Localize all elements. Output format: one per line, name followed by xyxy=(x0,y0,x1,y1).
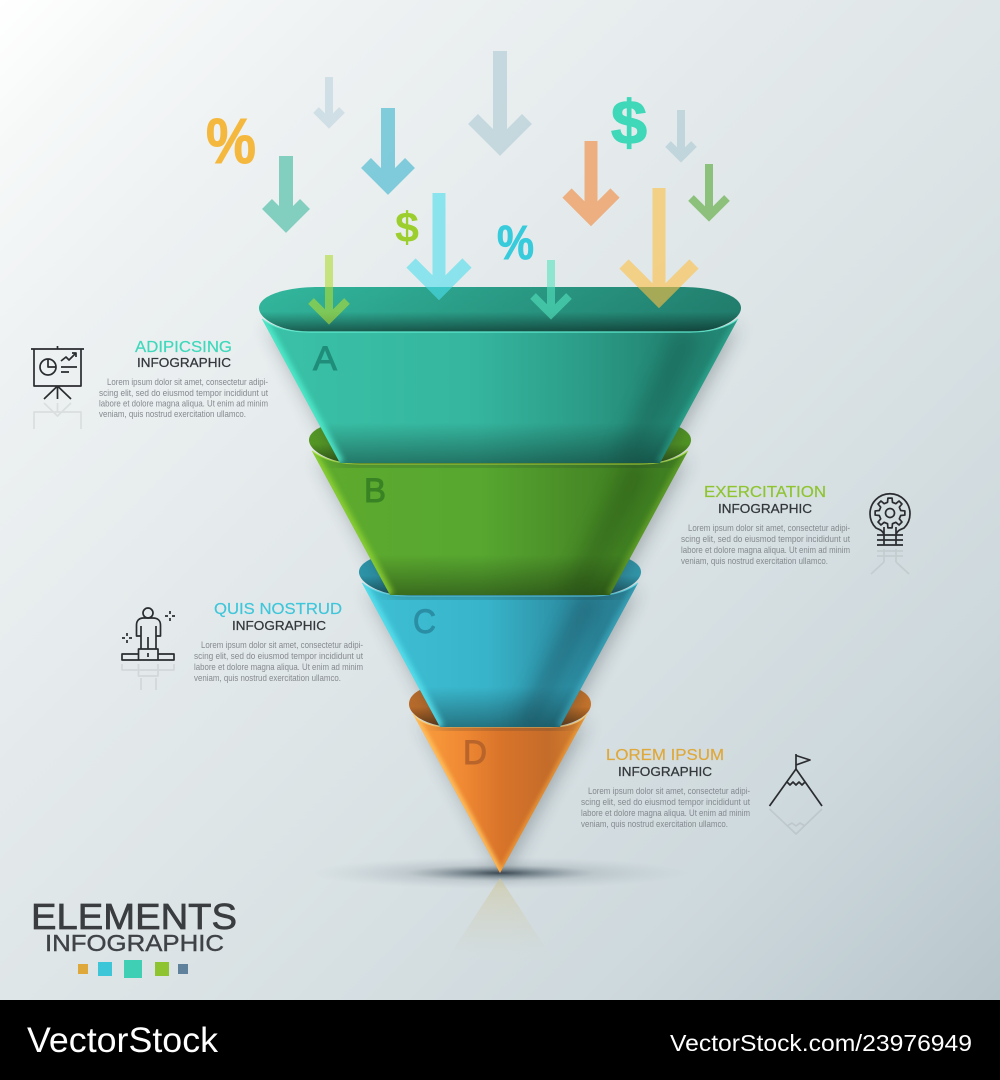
body text: scing elit, sed do eiusmod tempor incididunt ut xyxy=(194,651,363,661)
footer band xyxy=(0,1000,1000,1080)
footer url: VectorStock.com/23976949 xyxy=(670,1030,972,1056)
body text xyxy=(581,786,750,829)
heading: QUIS NOSTRUD xyxy=(214,601,342,618)
subheading: INFOGRAPHIC xyxy=(232,619,326,633)
footer logo: VectorStock xyxy=(27,1021,219,1060)
arrow: blue xyxy=(366,108,410,185)
body text: Lorem ipsum dolor sit amet, consectetur adipi- xyxy=(201,640,363,650)
body text: veniam, quis nostrud exercitation ullamco. xyxy=(194,673,341,683)
subheading: INFOGRAPHIC xyxy=(618,765,712,779)
floor shadow under funnel tip xyxy=(310,857,690,889)
body text: Lorem ipsum dolor sit amet, consectetur adipi- xyxy=(688,523,850,533)
icon: person on podium xyxy=(122,608,175,690)
arrow: cyan xyxy=(411,193,467,291)
icon: dollar teal: $ xyxy=(611,89,647,158)
funnel segment C xyxy=(359,551,641,731)
letter C: C xyxy=(413,603,436,641)
letter A: A xyxy=(313,340,337,378)
arrow: small grey right xyxy=(668,110,694,157)
body text xyxy=(194,640,363,683)
panel: adipicsing xyxy=(99,339,268,419)
icon: percent orange: % xyxy=(206,105,256,177)
body text xyxy=(99,377,268,419)
heading: LOREM IPSUM xyxy=(606,747,724,764)
panel: exercitation xyxy=(681,484,850,566)
body text: labore et dolore magna aliqua. Ut enim ad minim xyxy=(681,545,850,555)
icon: presentation board xyxy=(31,346,84,429)
arrow: green xyxy=(691,164,727,216)
subheading: INFOGRAPHIC xyxy=(718,502,812,516)
title line 1: ELEMENTS xyxy=(31,896,237,937)
arrow: mint xyxy=(533,260,569,314)
icon: percent cyan: % xyxy=(497,217,534,270)
body text: labore et dolore magna aliqua. Ut enim ad minim xyxy=(194,662,363,672)
body text: scing elit, sed do eiusmod tempor incididunt ut xyxy=(681,534,850,544)
funnel segment A xyxy=(259,287,741,467)
icon: light bulb with gear xyxy=(870,494,910,574)
body text xyxy=(681,523,850,566)
funnel segment D xyxy=(409,682,591,876)
arrow: small grey xyxy=(316,77,342,123)
body text: scing elit, sed do eiusmod tempor incididunt ut xyxy=(99,388,268,398)
body text: Lorem ipsum dolor sit amet, consectetur adipi- xyxy=(588,786,750,796)
arrow: teal xyxy=(267,156,305,223)
legend squares xyxy=(78,960,188,978)
arrow: lime xyxy=(311,255,347,319)
arrow: orange xyxy=(567,141,615,217)
title line 2: INFOGRAPHIC xyxy=(45,930,224,956)
title: elements infographic xyxy=(31,896,237,956)
body text: scing elit, sed do eiusmod tempor incididunt ut xyxy=(581,797,750,807)
letter B: B xyxy=(364,472,386,510)
arrow: yellow xyxy=(624,188,694,299)
body text: labore et dolore magna aliqua. Ut enim ad minim xyxy=(581,808,750,818)
funnel xyxy=(259,287,741,876)
subheading: INFOGRAPHIC xyxy=(137,356,231,370)
heading: ADIPICSING xyxy=(135,339,232,356)
panel: lorem ipsum xyxy=(581,747,750,829)
body text: veniam, quis nostrud exercitation ullamco. xyxy=(681,556,828,566)
body text: veniam, quis nostrud exercitation ullamco. xyxy=(581,819,728,829)
icon: mountain with flag xyxy=(770,754,822,834)
body text: veniam, quis nostrud exercitation ullamco. xyxy=(99,409,246,419)
body text: Lorem ipsum dolor sit amet, consectetur adipi- xyxy=(107,377,268,387)
icon: dollar green: $ xyxy=(395,204,419,252)
letter D: D xyxy=(463,734,487,772)
panel: quis nostrud xyxy=(194,601,363,683)
heading: EXERCITATION xyxy=(704,484,826,501)
funnel reflection xyxy=(445,878,555,962)
arrow: large grey xyxy=(473,51,527,146)
body text: labore et dolore magna aliqua. Ut enim ad minim xyxy=(99,398,268,408)
funnel segment B xyxy=(309,419,691,599)
